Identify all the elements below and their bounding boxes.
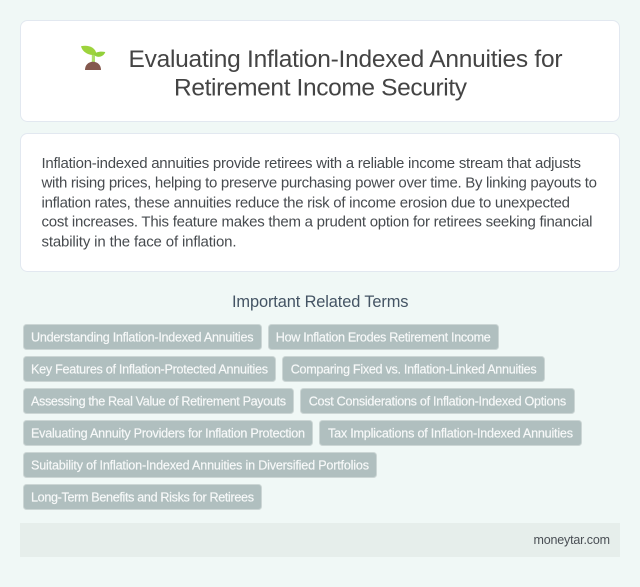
tag: providers <box>24 420 312 446</box>
tag: tax <box>320 420 582 446</box>
panel: header card <box>20 20 620 122</box>
tag: fixed vs linked: Comparing Fixed vs. Inflation-Linked Annuities <box>291 362 537 376</box>
tag: cost <box>300 388 574 414</box>
text block: description: cost increases. This feature makes them a prudent option for retirees seeking financial <box>42 214 592 231</box>
tag: erosion: How Inflation Erodes Retirement Income <box>276 330 491 344</box>
tag: tax: Tax Implications of Inflation-Indexed Annuities <box>328 426 573 440</box>
heading: related terms: Important Related Terms <box>232 293 408 311</box>
tag: key features <box>24 356 276 382</box>
footer: moneytar.com <box>534 533 610 547</box>
title <box>128 46 562 102</box>
tag: fixed vs linked <box>282 356 544 382</box>
title: Retirement Income Security <box>174 74 468 102</box>
tag: providers: Evaluating Annuity Providers for Inflation Protection <box>31 426 305 440</box>
tag: key features: Key Features of Inflation-Protected Annuities <box>31 362 268 376</box>
tag: suitability: Suitability of Inflation-Indexed Annuities in Diversified Portfolios <box>31 458 369 472</box>
text block: description: inflation rates, these annuities reduce the risk of income erosion due to unexpected <box>42 194 570 211</box>
panel: term tags <box>24 324 582 510</box>
icon: sprout <box>81 46 105 70</box>
text block: description: Inflation-indexed annuities provide retirees with a reliable income stream that adjusts <box>42 155 581 172</box>
tag: long-term <box>24 484 262 510</box>
tag: real value: Assessing the Real Value of Retirement Payouts <box>31 394 286 408</box>
text block: description <box>40 155 597 250</box>
tag: understanding: Understanding Inflation-Indexed Annuities <box>31 330 254 344</box>
tag: understanding <box>24 324 262 350</box>
text block: description: with rising prices, helping to preserve purchasing power over time. By linking payouts to <box>40 174 597 192</box>
tag: cost: Cost Considerations of Inflation-Indexed Options <box>309 394 566 408</box>
tag: long-term: Long-Term Benefits and Risks for Retirees <box>31 490 254 504</box>
panel: description card <box>20 134 620 272</box>
tag: erosion <box>268 324 498 350</box>
title: Evaluating Inflation-Indexed Annuities for <box>128 46 562 73</box>
tag: real value <box>24 388 294 414</box>
text block: description: stability in the face of inflation. <box>42 233 236 250</box>
tag: suitability <box>24 452 376 478</box>
footer <box>20 523 620 557</box>
